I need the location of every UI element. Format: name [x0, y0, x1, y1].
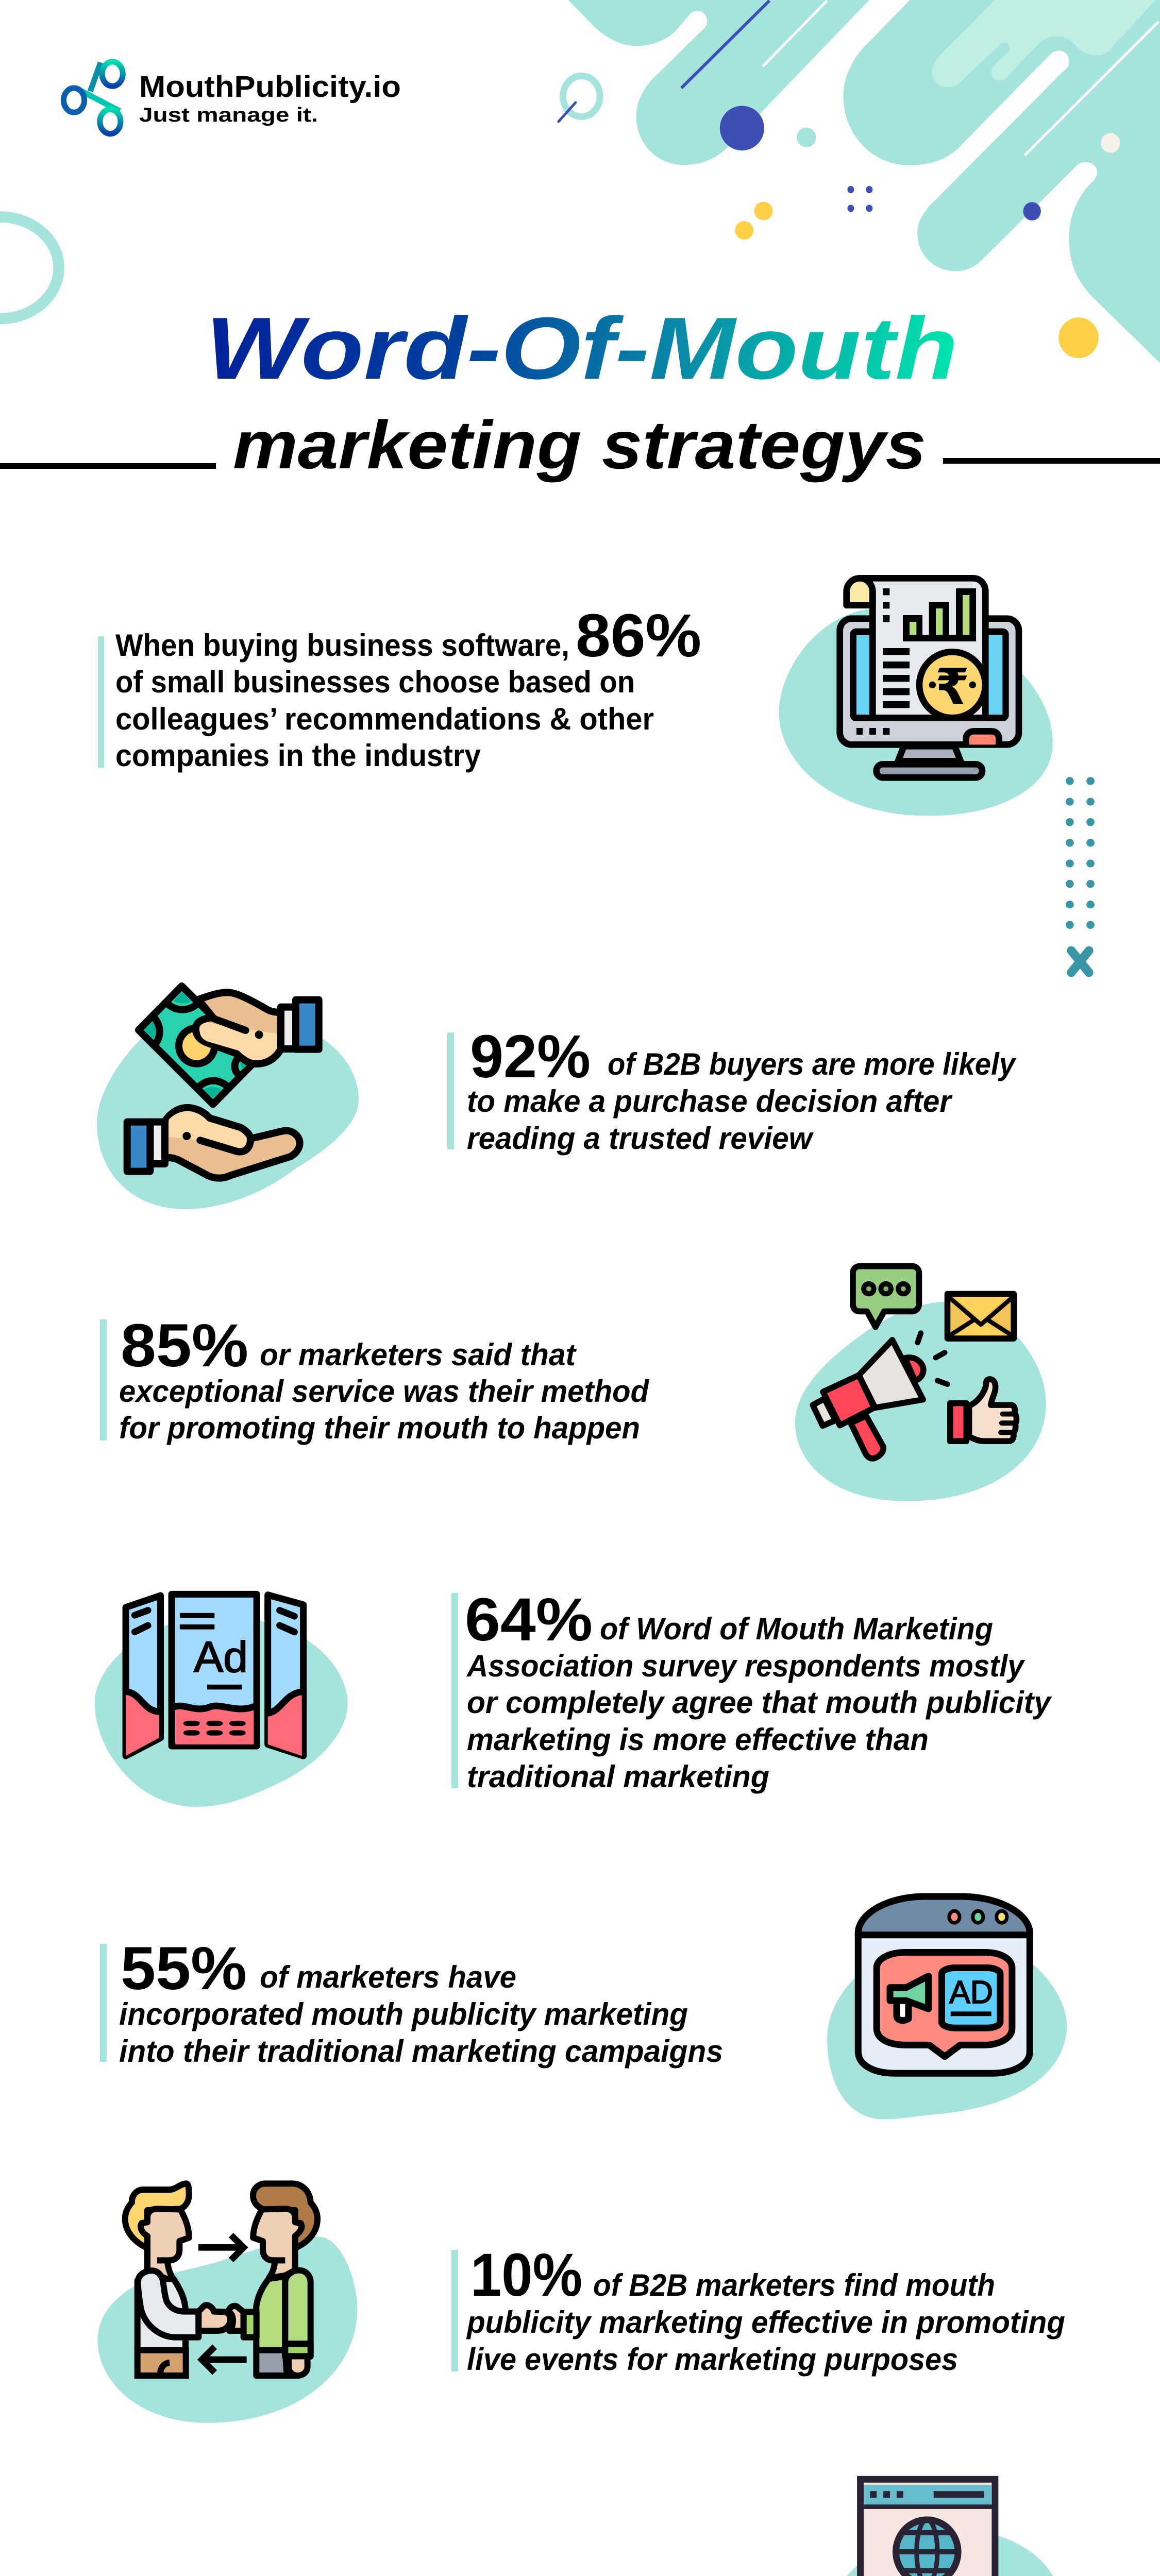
- accent bar: [451, 1593, 458, 1788]
- stat text: When buying business software,: [115, 628, 569, 663]
- title line one: Word-Of-Mouth: [206, 299, 958, 398]
- stat text: publicity marketing effective in promoting: [466, 2305, 1065, 2340]
- stat text: Association survey respondents mostly: [466, 1649, 1025, 1683]
- stat text: exceptional service was their method: [119, 1374, 649, 1409]
- blob and icon: megaphone, chat, mail, thumb: [795, 1266, 1046, 1501]
- blob: [808, 2526, 1063, 2576]
- blob: [97, 2236, 357, 2423]
- stat text: [119, 1935, 723, 2069]
- icon: advert brochure: [126, 1594, 304, 1756]
- stat text: [467, 1023, 1016, 1156]
- stat text: [466, 2241, 1065, 2377]
- panel: 64% WOMMA survey: [95, 1586, 1052, 1807]
- stat text: marketing is more effective than: [467, 1722, 929, 1757]
- stat text: incorporated mouth publicity marketing: [119, 1997, 688, 2031]
- decoration: teal dot column with x: [1066, 777, 1095, 973]
- stat text: of B2B buyers are more likely: [608, 1047, 1016, 1081]
- panel: 10% live events: [97, 2183, 1065, 2423]
- icon: monitor with report: [840, 578, 1019, 777]
- stat text: [115, 602, 701, 773]
- accent bar: [100, 1944, 107, 2062]
- stat text: for promoting their mouth to happen: [119, 1411, 640, 1445]
- logo tagline: Just manage it.: [139, 104, 318, 126]
- stat text: traditional marketing: [467, 1759, 769, 1794]
- title: [0, 299, 1160, 483]
- top background decoration: [0, 0, 1160, 363]
- panel: 85% exceptional service: [100, 1266, 1046, 1501]
- stat text: companies in the industry: [115, 738, 481, 773]
- stat text: or completely agree that mouth publicity: [467, 1685, 1052, 1720]
- brochure ad label: Ad: [194, 1633, 248, 1681]
- stat text: into their traditional marketing campaigns: [119, 2034, 723, 2069]
- stat text: reading a trusted review: [467, 1121, 814, 1156]
- rupee symbol: ₹: [935, 658, 969, 716]
- blob: [95, 1616, 348, 1807]
- icon: browser with advert: [858, 1896, 1030, 2073]
- icon: two people shaking hands: [125, 2183, 317, 2376]
- stat text: colleagues’ recommendations & other: [115, 702, 654, 736]
- stat text: [465, 1586, 1052, 1794]
- stat text: live events for marketing purposes: [467, 2342, 958, 2377]
- stat text: 55%: [121, 1935, 247, 2003]
- accent bar: [100, 1319, 107, 1440]
- accent bar: [447, 1032, 454, 1149]
- panel: 55% traditional campaigns: [100, 1896, 1067, 2120]
- accent bar: [451, 2250, 458, 2371]
- title line two: marketing strategys: [233, 407, 926, 483]
- panel: 92% B2B buyers: [97, 986, 1016, 1209]
- logo: [63, 62, 401, 134]
- stat text: or marketers said that: [260, 1337, 577, 1372]
- blob: [97, 1017, 359, 1209]
- stat text: 92%: [470, 1023, 591, 1091]
- accent bar: [98, 636, 104, 768]
- stat text: 85%: [121, 1312, 248, 1380]
- stat text: of marketers have: [260, 1960, 516, 1994]
- stat text: [119, 1312, 649, 1445]
- blob: [827, 1934, 1067, 2120]
- blob: [779, 609, 1053, 816]
- browser ad label: AD: [949, 1975, 993, 2010]
- stat text: to make a purchase decision after: [467, 1084, 953, 1118]
- logo name: MouthPublicity.io: [139, 70, 401, 104]
- icon: hands exchanging money: [127, 986, 319, 1178]
- icon: logo mark: [63, 62, 123, 134]
- stat text: 64%: [465, 1586, 593, 1654]
- panel: 86% small businesses: [98, 578, 1053, 816]
- panel: top traffic sources: [98, 2479, 1063, 2576]
- stat text: of Word of Mouth Marketing: [600, 1612, 993, 1646]
- icon: browser globe and users: [827, 2479, 1028, 2576]
- stat text: 10%: [470, 2241, 582, 2309]
- stat text: of small businesses choose based on: [115, 665, 635, 699]
- stat text: 86%: [576, 602, 701, 670]
- stat text: of B2B marketers find mouth: [593, 2268, 995, 2302]
